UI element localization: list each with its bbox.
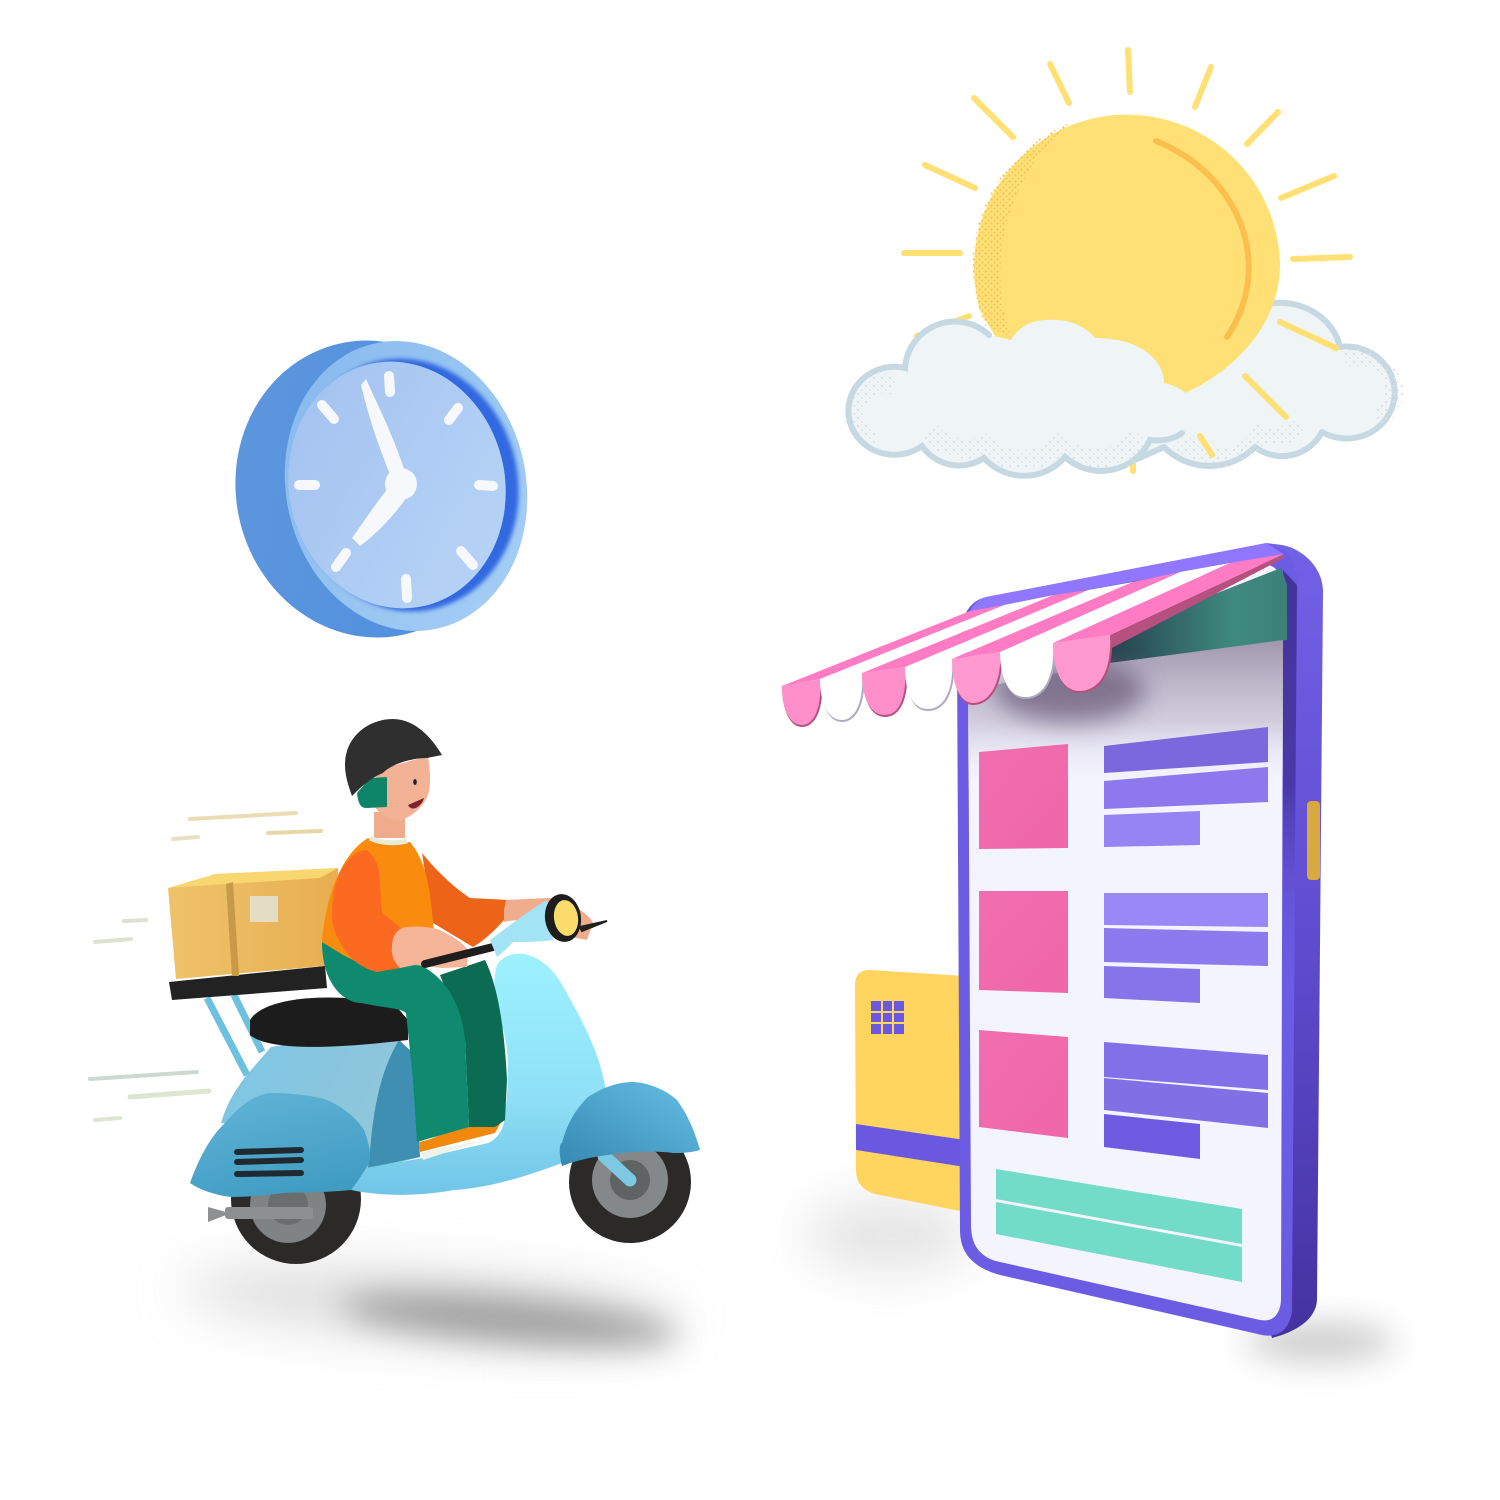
helmet [345, 719, 442, 796]
seat [250, 997, 408, 1047]
teal button bottom [996, 1202, 1242, 1282]
shadow: phone ground [805, 1200, 1395, 1362]
clock face [266, 341, 528, 629]
teal button top [996, 1169, 1242, 1244]
rider near upper arm [332, 850, 400, 972]
text bars [1104, 1042, 1268, 1090]
sun inner arc [1156, 141, 1249, 337]
sun rays [904, 50, 1350, 471]
scooter rear body [221, 1038, 420, 1170]
rider torso [322, 838, 436, 972]
rear wheel [231, 1134, 361, 1264]
pink tile [979, 744, 1068, 849]
row 3 [979, 1030, 1268, 1159]
pink tile [979, 1030, 1068, 1138]
pink tile [979, 891, 1068, 993]
clock rim [258, 318, 554, 654]
awning scallops [782, 635, 1110, 725]
awning pink stripes [782, 554, 1284, 686]
icon: wall clock [208, 315, 554, 663]
rack [169, 966, 327, 1000]
icon: front left cloud [848, 320, 1186, 476]
rear rack struts [207, 995, 262, 1075]
phone screen [968, 565, 1283, 1320]
scooter front shield and floor [351, 954, 606, 1195]
icon: sun [904, 50, 1350, 471]
clock dark ring [270, 337, 542, 633]
phone frame [957, 546, 1297, 1336]
icon: credit card [855, 970, 965, 1212]
shop interior wall [1110, 568, 1287, 663]
delivery box [168, 868, 338, 979]
front wheel [569, 1121, 691, 1243]
rider far leg [440, 960, 507, 1127]
rear fender [190, 1093, 370, 1197]
front fender [560, 1082, 700, 1166]
card stripe [856, 1124, 965, 1167]
vent grille [237, 1150, 301, 1174]
icon: back right cloud [1135, 303, 1395, 466]
awning shadow [968, 640, 1283, 790]
clock hands [352, 379, 417, 546]
clock ticks [299, 376, 493, 598]
awning [782, 554, 1284, 727]
awning underside edge [1110, 554, 1284, 649]
text bars [1104, 893, 1268, 927]
speed lines [90, 813, 321, 1120]
awning white stripes [820, 563, 1230, 679]
rear body dark panel [368, 1040, 420, 1168]
phone store [782, 543, 1323, 1338]
shadow: scooter ground [178, 1256, 682, 1357]
handlebar grip [425, 947, 493, 964]
exhaust pipe [208, 1207, 313, 1222]
lever [580, 921, 607, 931]
rider near leg [322, 942, 469, 1142]
phone right inner dark [1283, 570, 1297, 1000]
phone side edge [1260, 543, 1323, 1338]
helmet ear guard [357, 777, 387, 808]
rider face details [408, 779, 424, 809]
clock body [208, 315, 536, 663]
rider collar [370, 838, 407, 843]
card chip [871, 1001, 904, 1034]
row 2 [979, 891, 1268, 1003]
rider far hand [504, 898, 593, 940]
awning scallop shadows [782, 635, 1112, 727]
rider far arm [422, 853, 510, 947]
rider shoe [419, 1117, 504, 1160]
phone side button [1307, 801, 1320, 880]
text bars [1104, 727, 1268, 773]
phone frame top highlight [970, 543, 1284, 611]
row 1 [979, 727, 1268, 849]
rider neck [374, 812, 405, 838]
scooter headset [490, 900, 553, 957]
sun disc [974, 115, 1280, 393]
rider near forearm [392, 927, 468, 968]
headlight [542, 892, 584, 944]
sun speckled shade [973, 122, 1072, 338]
scooter and rider [168, 719, 700, 1264]
rider head [370, 756, 430, 820]
